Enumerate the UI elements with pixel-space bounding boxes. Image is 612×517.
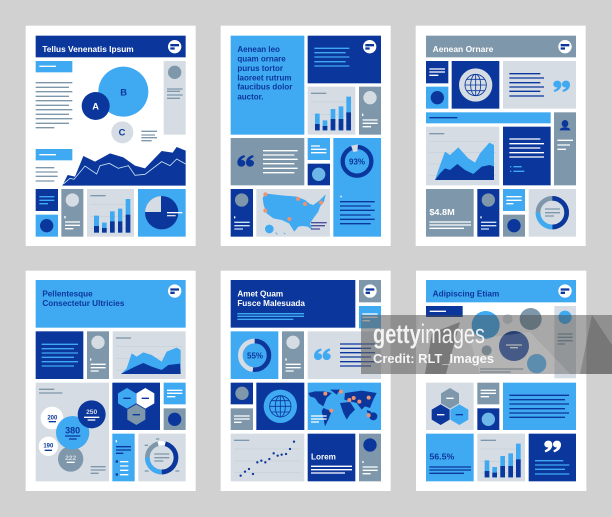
sidebar profile <box>554 112 576 185</box>
tile: lines <box>503 189 525 211</box>
bubble chart <box>36 383 109 481</box>
tile: profile <box>282 331 304 379</box>
sidebar <box>554 306 576 378</box>
quote tile <box>503 61 576 109</box>
pie chart <box>138 189 186 237</box>
panel: page 2 Aenean leo <box>221 26 391 246</box>
headline block <box>231 36 304 135</box>
header: Tellus Venenatis Ipsum: Tellus Venenatis Ipsum <box>42 44 134 54</box>
tile: profile <box>359 434 381 481</box>
stat 56.5% <box>426 434 474 481</box>
tile: lines <box>426 61 448 83</box>
tile: profile <box>87 331 109 379</box>
header: Pellentesque Consectetur Ultricies <box>36 280 186 328</box>
headline block: quam ornare <box>237 55 286 64</box>
panel: page 5 Amet Quam <box>221 271 391 491</box>
tile: circle <box>426 87 448 109</box>
panel: page 4 Pellentesque <box>26 271 196 491</box>
donut chart <box>529 189 576 237</box>
bubble chart: 190 <box>43 444 54 450</box>
tile: profile dark <box>477 189 499 237</box>
header: Aenean Ornare: Aenean Ornare <box>433 44 494 54</box>
area chart <box>113 331 186 379</box>
quote tile <box>529 434 576 481</box>
bubble cluster <box>472 308 546 373</box>
bar chart <box>308 87 355 135</box>
tile: lines <box>231 408 253 430</box>
tile: circle <box>477 408 499 430</box>
tile: circle <box>36 215 58 237</box>
bubble chart: 222 <box>65 455 77 462</box>
area chart <box>62 147 186 186</box>
header: Pellentesque Consectetur Ultricies: Consectetur Ultricies <box>42 299 125 308</box>
header: Amet Quam Fusce Malesuada: Fusce Malesuada <box>237 299 305 308</box>
list tile <box>112 434 135 481</box>
world map with pins <box>308 383 381 430</box>
quote tile <box>308 331 381 379</box>
dark text tile with logo <box>308 36 381 83</box>
header: Tellus Venenatis Ipsum <box>36 36 186 57</box>
tile: circle <box>231 383 253 404</box>
donut 55% <box>231 331 278 379</box>
headline block: purus tortor <box>237 64 283 73</box>
bar chart <box>477 434 525 481</box>
venn circles A B C: A <box>92 101 99 111</box>
watermark text: gettyimages: gettyimages <box>373 319 485 349</box>
header: Amet Quam Fusce Malesuada <box>231 280 355 328</box>
tile: lines <box>359 306 381 328</box>
bubble chart: 250 <box>86 409 98 416</box>
header: Amet Quam Fusce Malesuada: Amet Quam <box>237 289 283 298</box>
Lorem tile: Lorem <box>311 452 336 461</box>
tile: dark text <box>36 189 58 211</box>
venn circles A B C: B <box>120 87 127 97</box>
headline block: Aenean leo <box>237 45 280 54</box>
text tile <box>503 383 576 430</box>
banner <box>426 112 551 123</box>
panel: page 1 Tellus Venenatis Ipsum <box>26 26 196 246</box>
venn circles A B C: C <box>119 128 126 138</box>
stat $4.8M: $4.8M <box>429 207 455 217</box>
donut 55%: 55% <box>247 351 263 360</box>
headline block: laoreet rutrum <box>237 73 291 82</box>
bubble chart: 380 <box>65 425 80 435</box>
donut 93%: 93% <box>349 157 365 166</box>
area chart <box>426 127 499 185</box>
tile: circle <box>503 215 525 237</box>
label bar <box>426 306 463 317</box>
venn circles A B C <box>82 67 157 143</box>
headline block: faucibus dolor <box>237 83 292 92</box>
dark text tile <box>503 127 551 185</box>
watermark band <box>361 315 612 374</box>
headline block: auctor. <box>237 92 264 101</box>
text block: chart note <box>36 149 72 181</box>
watermark text: credit: Credit: RLT_Images <box>373 352 494 366</box>
text block: intro <box>36 61 72 128</box>
header: Adipiscing Etiam: Adipiscing Etiam <box>433 289 499 298</box>
quote tile <box>231 138 304 185</box>
hexagon tile <box>112 383 160 430</box>
panel: page 6 Adipiscing Etiam <box>416 271 586 491</box>
tile: profile <box>61 189 83 237</box>
header: Adipiscing Etiam <box>426 280 576 302</box>
donut chart <box>138 434 186 481</box>
tile: lines <box>308 138 330 160</box>
panel: page 3 Aenean Ornare <box>416 26 586 246</box>
sidebar <box>164 61 186 135</box>
US map with pins <box>256 189 330 237</box>
tile: lines <box>477 383 499 404</box>
donut 93% <box>333 138 381 237</box>
tile: profile dark <box>231 189 253 237</box>
scatter plot <box>231 434 304 481</box>
bar chart <box>87 189 134 237</box>
bubble chart: 200 <box>47 415 58 421</box>
hexagon tile <box>426 383 474 430</box>
tile: circle <box>164 408 186 430</box>
header: Aenean Ornare <box>426 36 576 57</box>
tile: profile <box>359 87 381 135</box>
stat 56.5%: 56.5% <box>429 451 455 461</box>
tile: lines <box>164 383 186 404</box>
globe icon tile <box>256 383 304 430</box>
logo tile <box>359 280 381 302</box>
tile: circle <box>308 164 330 185</box>
dark text tile <box>36 331 83 379</box>
stat $4.8M <box>426 189 474 237</box>
header: Pellentesque Consectetur Ultricies: Pellentesque <box>42 289 93 298</box>
globe icon tile <box>452 61 499 109</box>
Lorem tile <box>308 434 355 481</box>
